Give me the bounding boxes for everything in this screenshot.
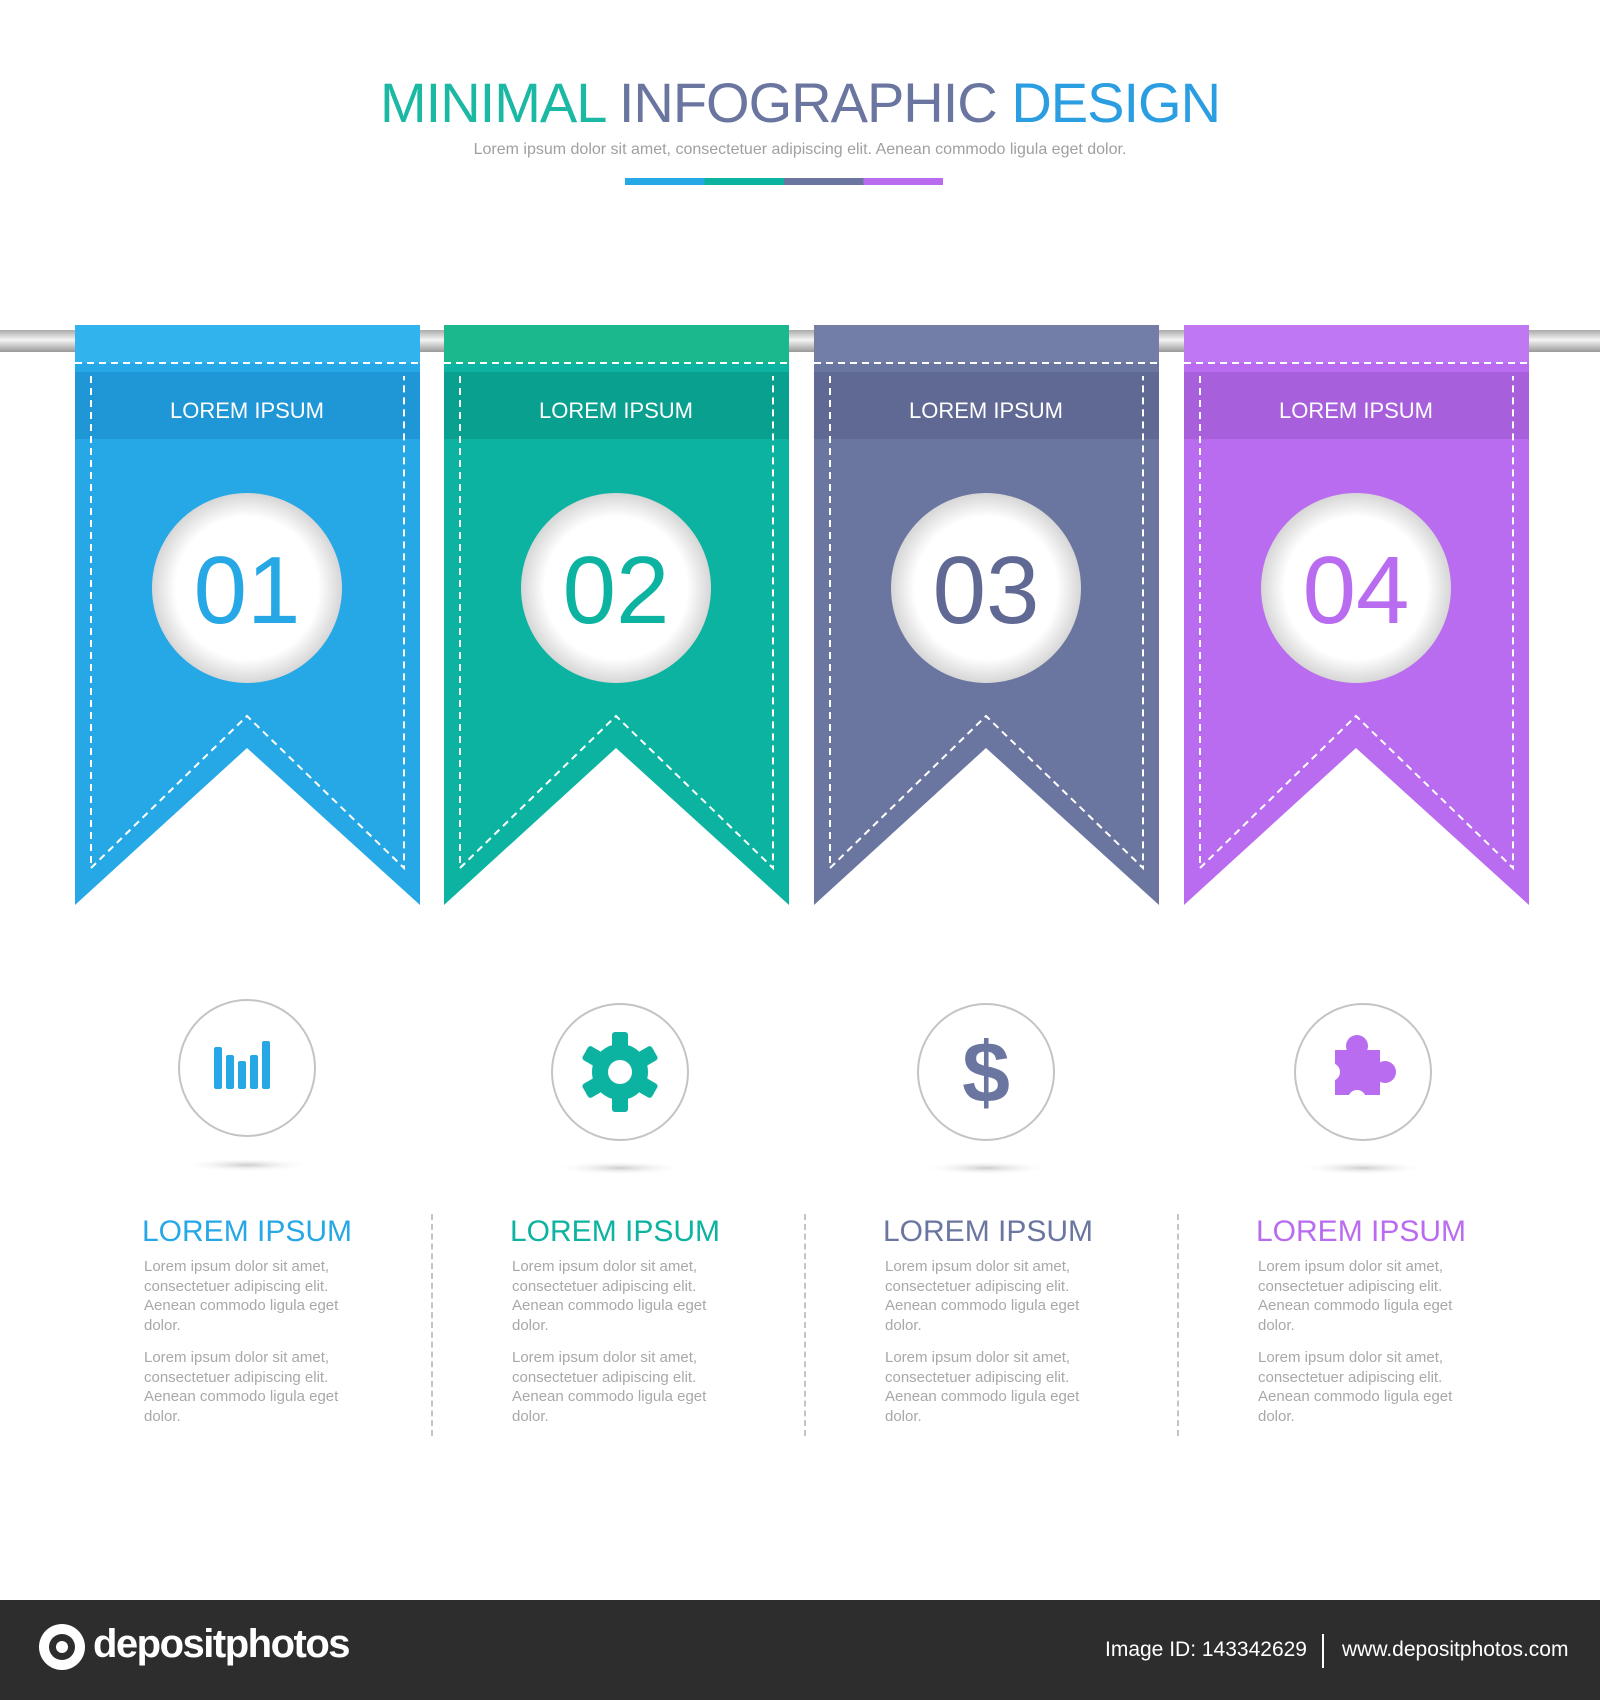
dividers [431,1214,433,1436]
column 4 text: LOREM IPSUM [1256,1215,1466,1248]
column 4 text [1256,1215,1466,1424]
column 3 text: LOREM IPSUM [883,1215,1093,1248]
icon: dollar: $ [962,1025,1010,1121]
column 4 text: Lorem ipsum dolor sit amet, consectetuer adipiscing elit. Aenean commodo ligula eget dolor. [1258,1349,1452,1424]
title: MINIMAL INFOGRAPHIC DESIGN [380,71,1220,134]
banner 4: 04 [1303,537,1409,644]
image id: Image ID: 143342629 [1105,1638,1307,1661]
icon: dollar [918,1004,1054,1175]
banner 1: 01 [194,537,300,644]
banner 1: LOREM IPSUM [170,398,324,423]
banner 2 [444,325,789,905]
icon: bar chart [179,1000,315,1172]
column 1 text [142,1215,352,1424]
banner 1 [75,325,420,905]
icon: gear [552,1004,688,1175]
logo: depositphotos [93,1622,349,1666]
banner 3 [814,325,1159,905]
banners [0,325,1600,905]
banner 4 [1184,325,1529,905]
banner 2: LOREM IPSUM [539,398,693,423]
column 3 text: Lorem ipsum dolor sit amet, consectetuer adipiscing elit. Aenean commodo ligula eget dolor. [885,1258,1079,1334]
column 1 text: LOREM IPSUM [142,1215,352,1248]
column 2 text: LOREM IPSUM [510,1215,720,1248]
column 3 text: Lorem ipsum dolor sit amet, consectetuer adipiscing elit. Aenean commodo ligula eget dolor. [885,1349,1079,1424]
rod [0,330,1600,352]
icons [178,999,1432,1172]
icon: puzzle [1295,1004,1431,1175]
subtitle: Lorem ipsum dolor sit amet, consectetuer adipiscing elit. Aenean commodo ligula eget dolor. [474,141,1126,158]
website: www.depositphotos.com [1342,1638,1568,1661]
banner 3: LOREM IPSUM [909,398,1063,423]
banner 3: 03 [933,537,1039,644]
column 2 text: Lorem ipsum dolor sit amet, consectetuer adipiscing elit. Aenean commodo ligula eget dolor. [512,1258,706,1334]
footer [0,1600,1600,1700]
column 1 text: Lorem ipsum dolor sit amet, consectetuer adipiscing elit. Aenean commodo ligula eget dolor. [144,1349,338,1424]
banner 4: LOREM IPSUM [1279,398,1433,423]
column 4 text: Lorem ipsum dolor sit amet, consectetuer adipiscing elit. Aenean commodo ligula eget dolor. [1258,1258,1452,1334]
column 2 text: Lorem ipsum dolor sit amet, consectetuer adipiscing elit. Aenean commodo ligula eget dolor. [512,1349,706,1424]
column 2 text [510,1215,720,1424]
underline colour bar [625,178,943,185]
column 1 text: Lorem ipsum dolor sit amet, consectetuer adipiscing elit. Aenean commodo ligula eget dolor. [144,1258,338,1334]
column 3 text [883,1215,1093,1424]
banner 2: 02 [563,537,669,644]
